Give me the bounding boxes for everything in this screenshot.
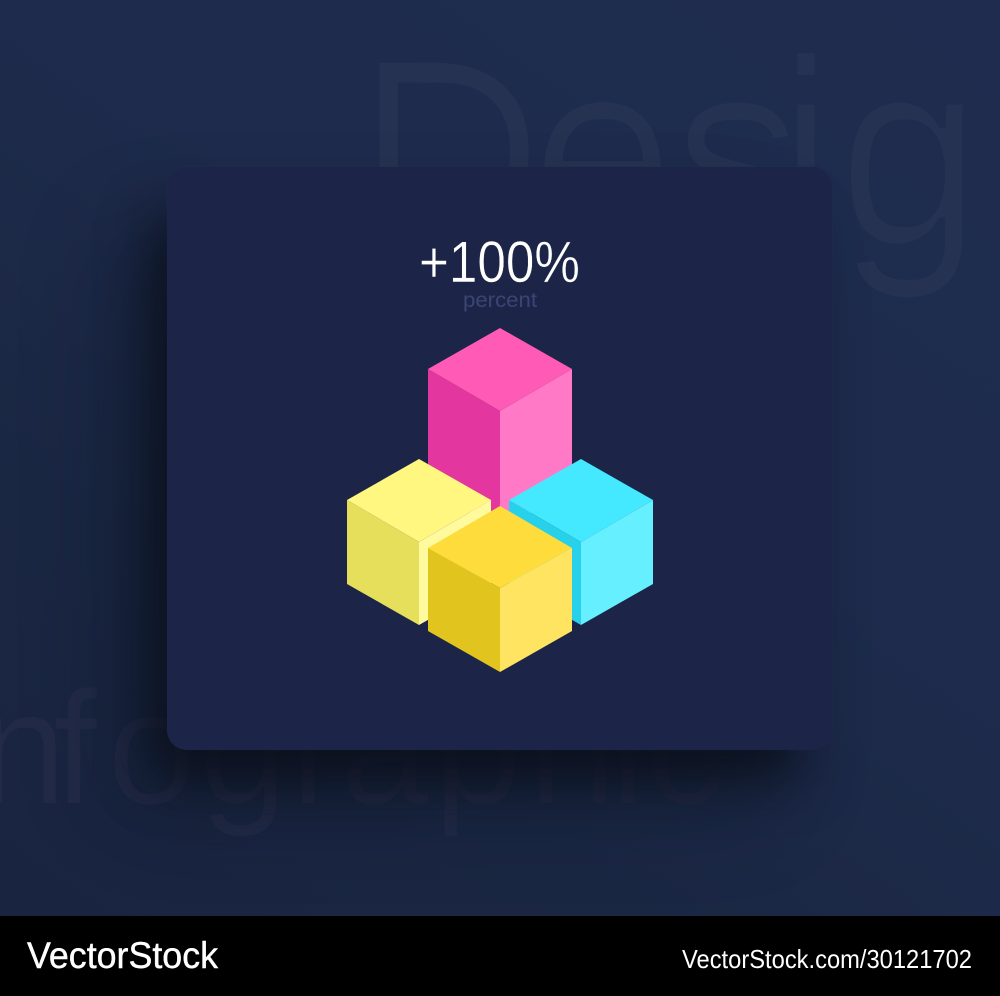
cube: cyan right — [509, 459, 653, 625]
headline: +100%: +100% — [419, 230, 580, 295]
footer logo: VectorStock: VectorStock — [27, 935, 218, 976]
footer image id: VectorStock.com/30121702 — [682, 944, 972, 974]
footer band — [0, 916, 1000, 996]
card panel — [167, 167, 832, 750]
cube: pink tall — [428, 328, 572, 530]
cube: gold front — [428, 506, 572, 672]
subheading: percent: percent — [463, 289, 537, 312]
watermark: Design: Desig — [355, 6, 983, 300]
cube: pale yellow left — [347, 459, 491, 625]
isometric cube chart — [347, 328, 653, 672]
